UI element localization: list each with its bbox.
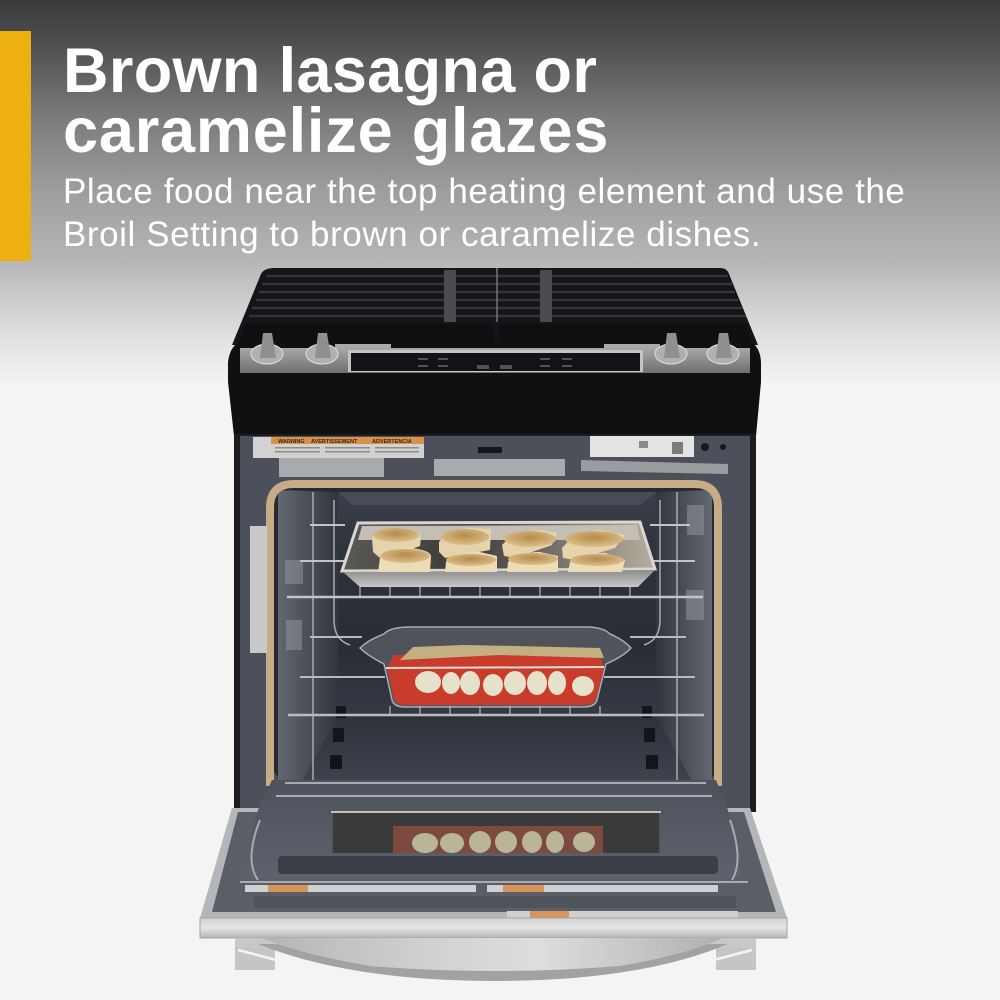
title	[63, 36, 609, 166]
oven cavity	[272, 484, 718, 785]
knob 4	[707, 333, 739, 364]
warning label: ADVERTENCIA	[372, 439, 412, 445]
warning label: WARNING	[278, 439, 305, 445]
door warning strips	[245, 885, 738, 918]
lower oven rack	[300, 637, 695, 677]
cooktop grates	[232, 268, 758, 345]
door window	[331, 806, 661, 853]
door trough	[278, 856, 718, 874]
door inner liner	[240, 780, 742, 878]
open oven door	[200, 780, 787, 918]
knob 2	[306, 333, 338, 364]
subtitle: Place food near the top heating element and use the	[63, 172, 905, 211]
upper oven rack	[287, 525, 703, 597]
sauce	[387, 655, 604, 705]
lower rack front rail	[288, 706, 704, 715]
rating labels	[279, 436, 728, 477]
subtitle	[63, 172, 905, 254]
accent bar	[0, 31, 31, 261]
control panel steel strip	[240, 344, 750, 373]
door lower channel	[254, 896, 736, 908]
door outer frame	[200, 808, 787, 918]
front row bread	[378, 548, 625, 572]
background gradient	[0, 0, 1000, 385]
door gasket	[270, 484, 718, 786]
knob 1	[251, 333, 283, 364]
side wall label	[250, 526, 267, 653]
title: caramelize glazes	[63, 96, 609, 166]
warning label	[253, 437, 424, 458]
glass dish with lasagna	[360, 627, 631, 707]
subtitle: Broil Setting to brown or caramelize dishes.	[63, 215, 761, 254]
upper rack wires	[360, 587, 630, 596]
oven frame	[234, 434, 756, 812]
knob 3	[655, 333, 687, 364]
cheese rolls	[415, 671, 594, 696]
knobs	[251, 333, 739, 364]
door handle	[235, 938, 756, 981]
warning label: AVERTISSEMENT	[311, 439, 358, 445]
range body front	[228, 342, 761, 436]
garlic bread slices	[372, 528, 625, 572]
back row bread	[372, 528, 625, 560]
lasagna topping	[400, 645, 604, 660]
baking tray	[342, 522, 655, 587]
title: Brown lasagna or	[63, 36, 597, 106]
door bottom bar	[200, 918, 787, 938]
